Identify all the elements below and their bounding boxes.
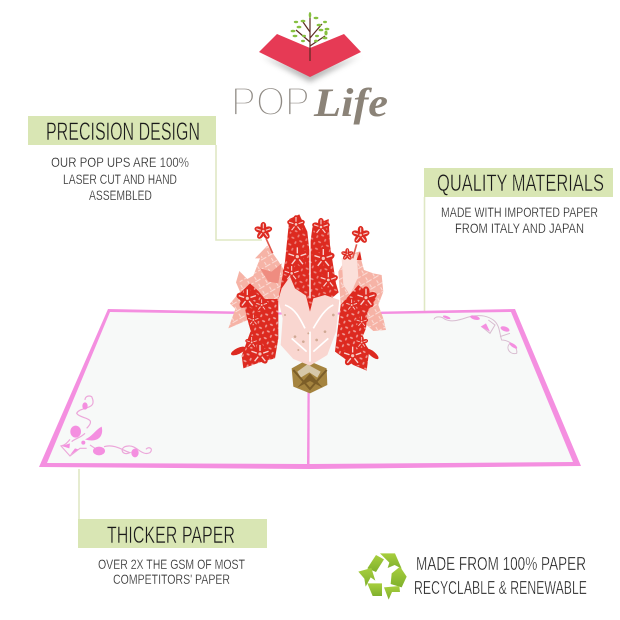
- description: COMPETITORS' PAPER: [113, 571, 230, 587]
- ornament: top right: [434, 314, 518, 354]
- description: ASSEMBLED: [89, 187, 152, 203]
- heading: PRECISION DESIGN: [46, 118, 200, 146]
- panel: precision design: [28, 116, 262, 240]
- flower top sprigs: [254, 222, 370, 283]
- pop-up flower: [228, 214, 386, 393]
- description: FROM ITALY AND JAPAN: [455, 220, 584, 236]
- logo tree: [291, 12, 329, 61]
- panel: quality materials: [424, 168, 613, 311]
- logo wordmark Life: Life: [313, 80, 388, 125]
- card pink border: [39, 309, 581, 469]
- heading: THICKER PAPER: [107, 522, 235, 549]
- flower back red columns: [278, 214, 339, 317]
- logo wordmark POP: POP: [231, 80, 310, 124]
- description: LASER CUT AND HAND: [63, 171, 177, 187]
- description: OUR POP UPS ARE 100%: [51, 154, 189, 170]
- flower back pink leaves: [228, 246, 386, 331]
- flower red side clusters: [230, 283, 380, 371]
- ornament: bottom left: [61, 396, 151, 457]
- connector line: [78, 469, 80, 519]
- heading bar: [424, 168, 613, 197]
- description: [441, 204, 598, 236]
- connector line: [216, 145, 262, 240]
- logo shadow: [262, 56, 360, 82]
- panel: recyclable: [358, 553, 587, 600]
- card right page: [310, 312, 573, 464]
- recycling text: [414, 554, 587, 598]
- logo open book chevron: [259, 34, 361, 77]
- icon: recycle arrows: [358, 553, 407, 600]
- heading bar: [28, 116, 216, 145]
- description: OVER 2X THE GSM OF MOST: [98, 556, 245, 572]
- card left page: [47, 312, 308, 464]
- description: [98, 556, 245, 587]
- connector line: [424, 197, 426, 311]
- heading bar: [78, 519, 267, 548]
- pop-up card: [39, 309, 581, 469]
- flower vase: [292, 360, 327, 393]
- panel: thicker paper: [78, 469, 267, 587]
- flower front pale petals: [278, 277, 339, 366]
- description: [51, 154, 189, 203]
- logo: [231, 12, 388, 125]
